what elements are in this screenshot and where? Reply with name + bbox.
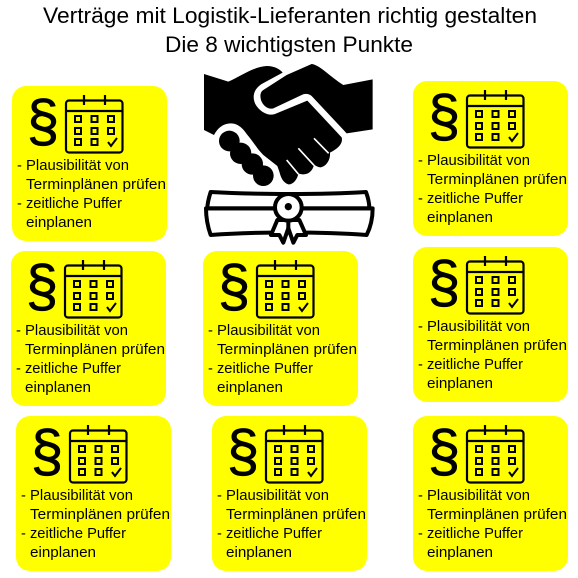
text block: Terminplänen prüfen [217,341,357,358]
icon: calendar [467,90,524,148]
text block: - Plausibilität von [418,487,530,504]
icon: diploma scroll with seal [206,192,373,243]
text block: Terminplänen prüfen [226,506,366,523]
text block: einplanen [30,544,96,561]
text block: einplanen [26,214,92,231]
text block: einplanen [427,544,493,561]
title: Die 8 wichtigsten Punkte [165,32,413,57]
icon: paragraph sign: § [428,84,460,149]
text block: - zeitliche Puffer [418,356,523,373]
text block: - Plausibilität von [208,322,320,339]
text block: Terminplänen prüfen [30,506,170,523]
icon: calendar [467,425,524,482]
icon: calendar [467,256,524,314]
text block: einplanen [25,379,91,396]
text block: - zeitliche Puffer [16,360,121,377]
text block [217,487,366,561]
icon: handshake [204,64,373,186]
panel: card 1 [12,86,167,241]
text block: - Plausibilität von [16,322,128,339]
text block [16,322,165,396]
text block: Terminplänen prüfen [427,171,567,188]
icon: calendar [266,425,322,482]
panel: card 7 [212,416,367,571]
icon: calendar [257,260,314,318]
text block: - Plausibilität von [21,487,133,504]
icon: paragraph sign: § [428,250,460,315]
text block [208,322,357,396]
title: Verträge mit Logistik-Lieferanten richtig gestalten [43,3,537,28]
text block: Terminplänen prüfen [427,337,567,354]
icon: calendar [66,95,122,152]
panel: card 3 [11,251,166,406]
text block [17,157,166,231]
icon: paragraph sign: § [227,419,259,484]
text block: - Plausibilität von [418,152,530,169]
icon: paragraph sign: § [428,419,460,484]
text block [21,487,170,561]
text block: Terminplänen prüfen [427,506,567,523]
text block [418,152,567,226]
text block: - zeitliche Puffer [418,190,523,207]
panel: card 8 [413,416,568,571]
text block: - Plausibilität von [418,318,530,335]
text block [418,318,567,392]
title [43,3,537,57]
text block: einplanen [217,379,283,396]
text block: - zeitliche Puffer [17,195,122,212]
icon: paragraph sign: § [26,254,58,319]
text block: - Plausibilität von [217,487,329,504]
icon: paragraph sign: § [27,89,59,154]
text block: einplanen [427,375,493,392]
text block: Terminplänen prüfen [25,341,165,358]
text block: Terminplänen prüfen [26,176,166,193]
text block: - zeitliche Puffer [217,525,322,542]
text block: - zeitliche Puffer [21,525,126,542]
text block: - zeitliche Puffer [418,525,523,542]
text block: einplanen [427,209,493,226]
text block [418,487,567,561]
icon: calendar [70,425,126,482]
text block: - Plausibilität von [17,157,129,174]
panel: card 5 [413,247,568,402]
text block: einplanen [226,544,292,561]
icon: calendar [65,260,122,318]
panel: card 4 [203,251,358,406]
panel: card 6 [16,416,171,571]
icon: paragraph sign: § [218,254,250,319]
icon: paragraph sign: § [31,419,63,484]
panel: card 2 [413,81,568,236]
text block: - zeitliche Puffer [208,360,313,377]
